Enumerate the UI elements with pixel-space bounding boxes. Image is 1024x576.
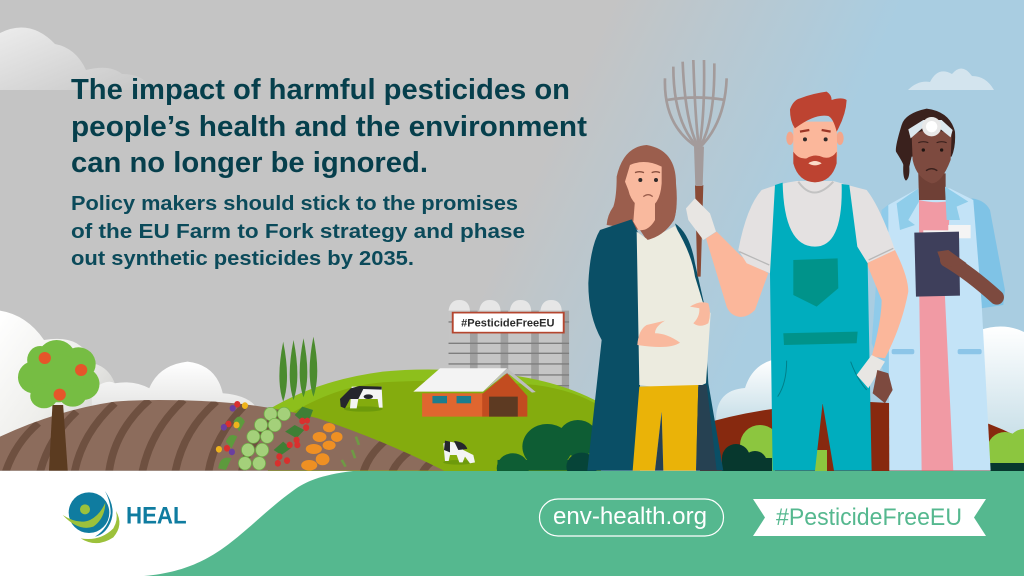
- apple tree: [18, 340, 100, 471]
- collar: [798, 182, 833, 192]
- logo swoosh: [63, 503, 105, 528]
- subheading: Policy makers should stick to the promises: [71, 192, 518, 215]
- badge: [948, 225, 971, 238]
- neck: [633, 200, 655, 230]
- subheading: out synthetic pesticides by 2035.: [71, 247, 414, 270]
- hands on belly: [637, 321, 680, 347]
- doctor hand: [873, 370, 893, 403]
- website pill: [540, 499, 724, 536]
- footer: green curve: [144, 471, 1024, 576]
- sleeve hems: [739, 248, 893, 265]
- strawberries row: [274, 407, 313, 467]
- pockets: [892, 349, 914, 354]
- cloud: right behind doctor: [980, 326, 1024, 440]
- logo crescent: [81, 511, 119, 543]
- seedlings: [342, 437, 359, 467]
- footer: white band: [0, 471, 1024, 576]
- ploughed field: [0, 400, 444, 472]
- hair front: [647, 187, 676, 240]
- cabbages row: [238, 407, 290, 470]
- heading: The impact of harmful pesticides on: [71, 74, 570, 106]
- barn: [413, 368, 536, 417]
- man: [686, 92, 908, 471]
- logo wordmark: HEAL: [126, 502, 187, 529]
- overall pocket seams: [778, 361, 867, 397]
- doctor arm: [937, 250, 997, 297]
- doctor: [872, 109, 1005, 471]
- woman: [587, 145, 723, 471]
- logo arcs: [95, 491, 113, 537]
- flowers row: [216, 401, 248, 470]
- pumpkins row: [301, 423, 343, 471]
- cow: lower: [443, 441, 475, 465]
- cows: [340, 386, 475, 465]
- trousers: [633, 385, 698, 471]
- right sleeve: [972, 198, 1005, 308]
- bushes: [497, 420, 598, 483]
- hashtag ribbon: #PesticideFreeEU: [776, 504, 962, 531]
- left clouds: [0, 311, 254, 443]
- head mirror: [908, 120, 953, 138]
- beard: [793, 152, 837, 182]
- silos: [449, 300, 569, 407]
- left sleeve: [872, 203, 890, 387]
- hair: [790, 92, 847, 132]
- lapels: [897, 188, 919, 230]
- cloud: top left: [0, 28, 150, 90]
- coat: [587, 219, 640, 471]
- pitchfork: [665, 60, 727, 277]
- heading: people’s health and the environment: [71, 111, 588, 143]
- cypress trees: [279, 337, 317, 402]
- silo sign: [453, 313, 564, 333]
- hair back: [607, 145, 677, 240]
- ears: [786, 132, 794, 145]
- website pill: env-health.org: [553, 503, 707, 530]
- green hill: [268, 369, 601, 472]
- gloves: [686, 198, 716, 240]
- face: [625, 162, 662, 209]
- subheading: [71, 192, 525, 270]
- waist band: [783, 332, 858, 345]
- brown hill behind people: [700, 402, 1024, 471]
- bushes behind people: [722, 425, 1024, 475]
- face: [912, 130, 952, 183]
- raised arm: [706, 232, 768, 317]
- cloud: top right: [908, 68, 994, 90]
- heading: [71, 74, 588, 179]
- people: [587, 60, 1005, 471]
- heading: can no longer be ignored.: [71, 147, 428, 179]
- hashtag ribbon: [753, 499, 986, 536]
- hair: [896, 109, 955, 181]
- logo dot: [80, 504, 90, 514]
- logo disc: [69, 492, 109, 533]
- cloud: behind man: [716, 360, 772, 420]
- clipboard: [914, 230, 960, 297]
- shirt: [637, 226, 711, 390]
- overalls: [770, 183, 872, 471]
- subheading: of the EU Farm to Fork strategy and phase: [71, 220, 525, 243]
- eyes and brows: [803, 137, 807, 141]
- dress: [919, 200, 953, 471]
- T-shirt: [738, 181, 895, 273]
- face: [793, 122, 837, 177]
- silo sign: #PesticideFreeEU: [461, 316, 555, 329]
- neck and chest: [918, 173, 946, 200]
- farm scene: [0, 300, 601, 483]
- cow: upper: [340, 386, 383, 412]
- bib pocket: [793, 258, 838, 307]
- lab coat: [888, 188, 991, 471]
- lowered arm: [867, 250, 908, 358]
- HEAL logo: [63, 491, 187, 543]
